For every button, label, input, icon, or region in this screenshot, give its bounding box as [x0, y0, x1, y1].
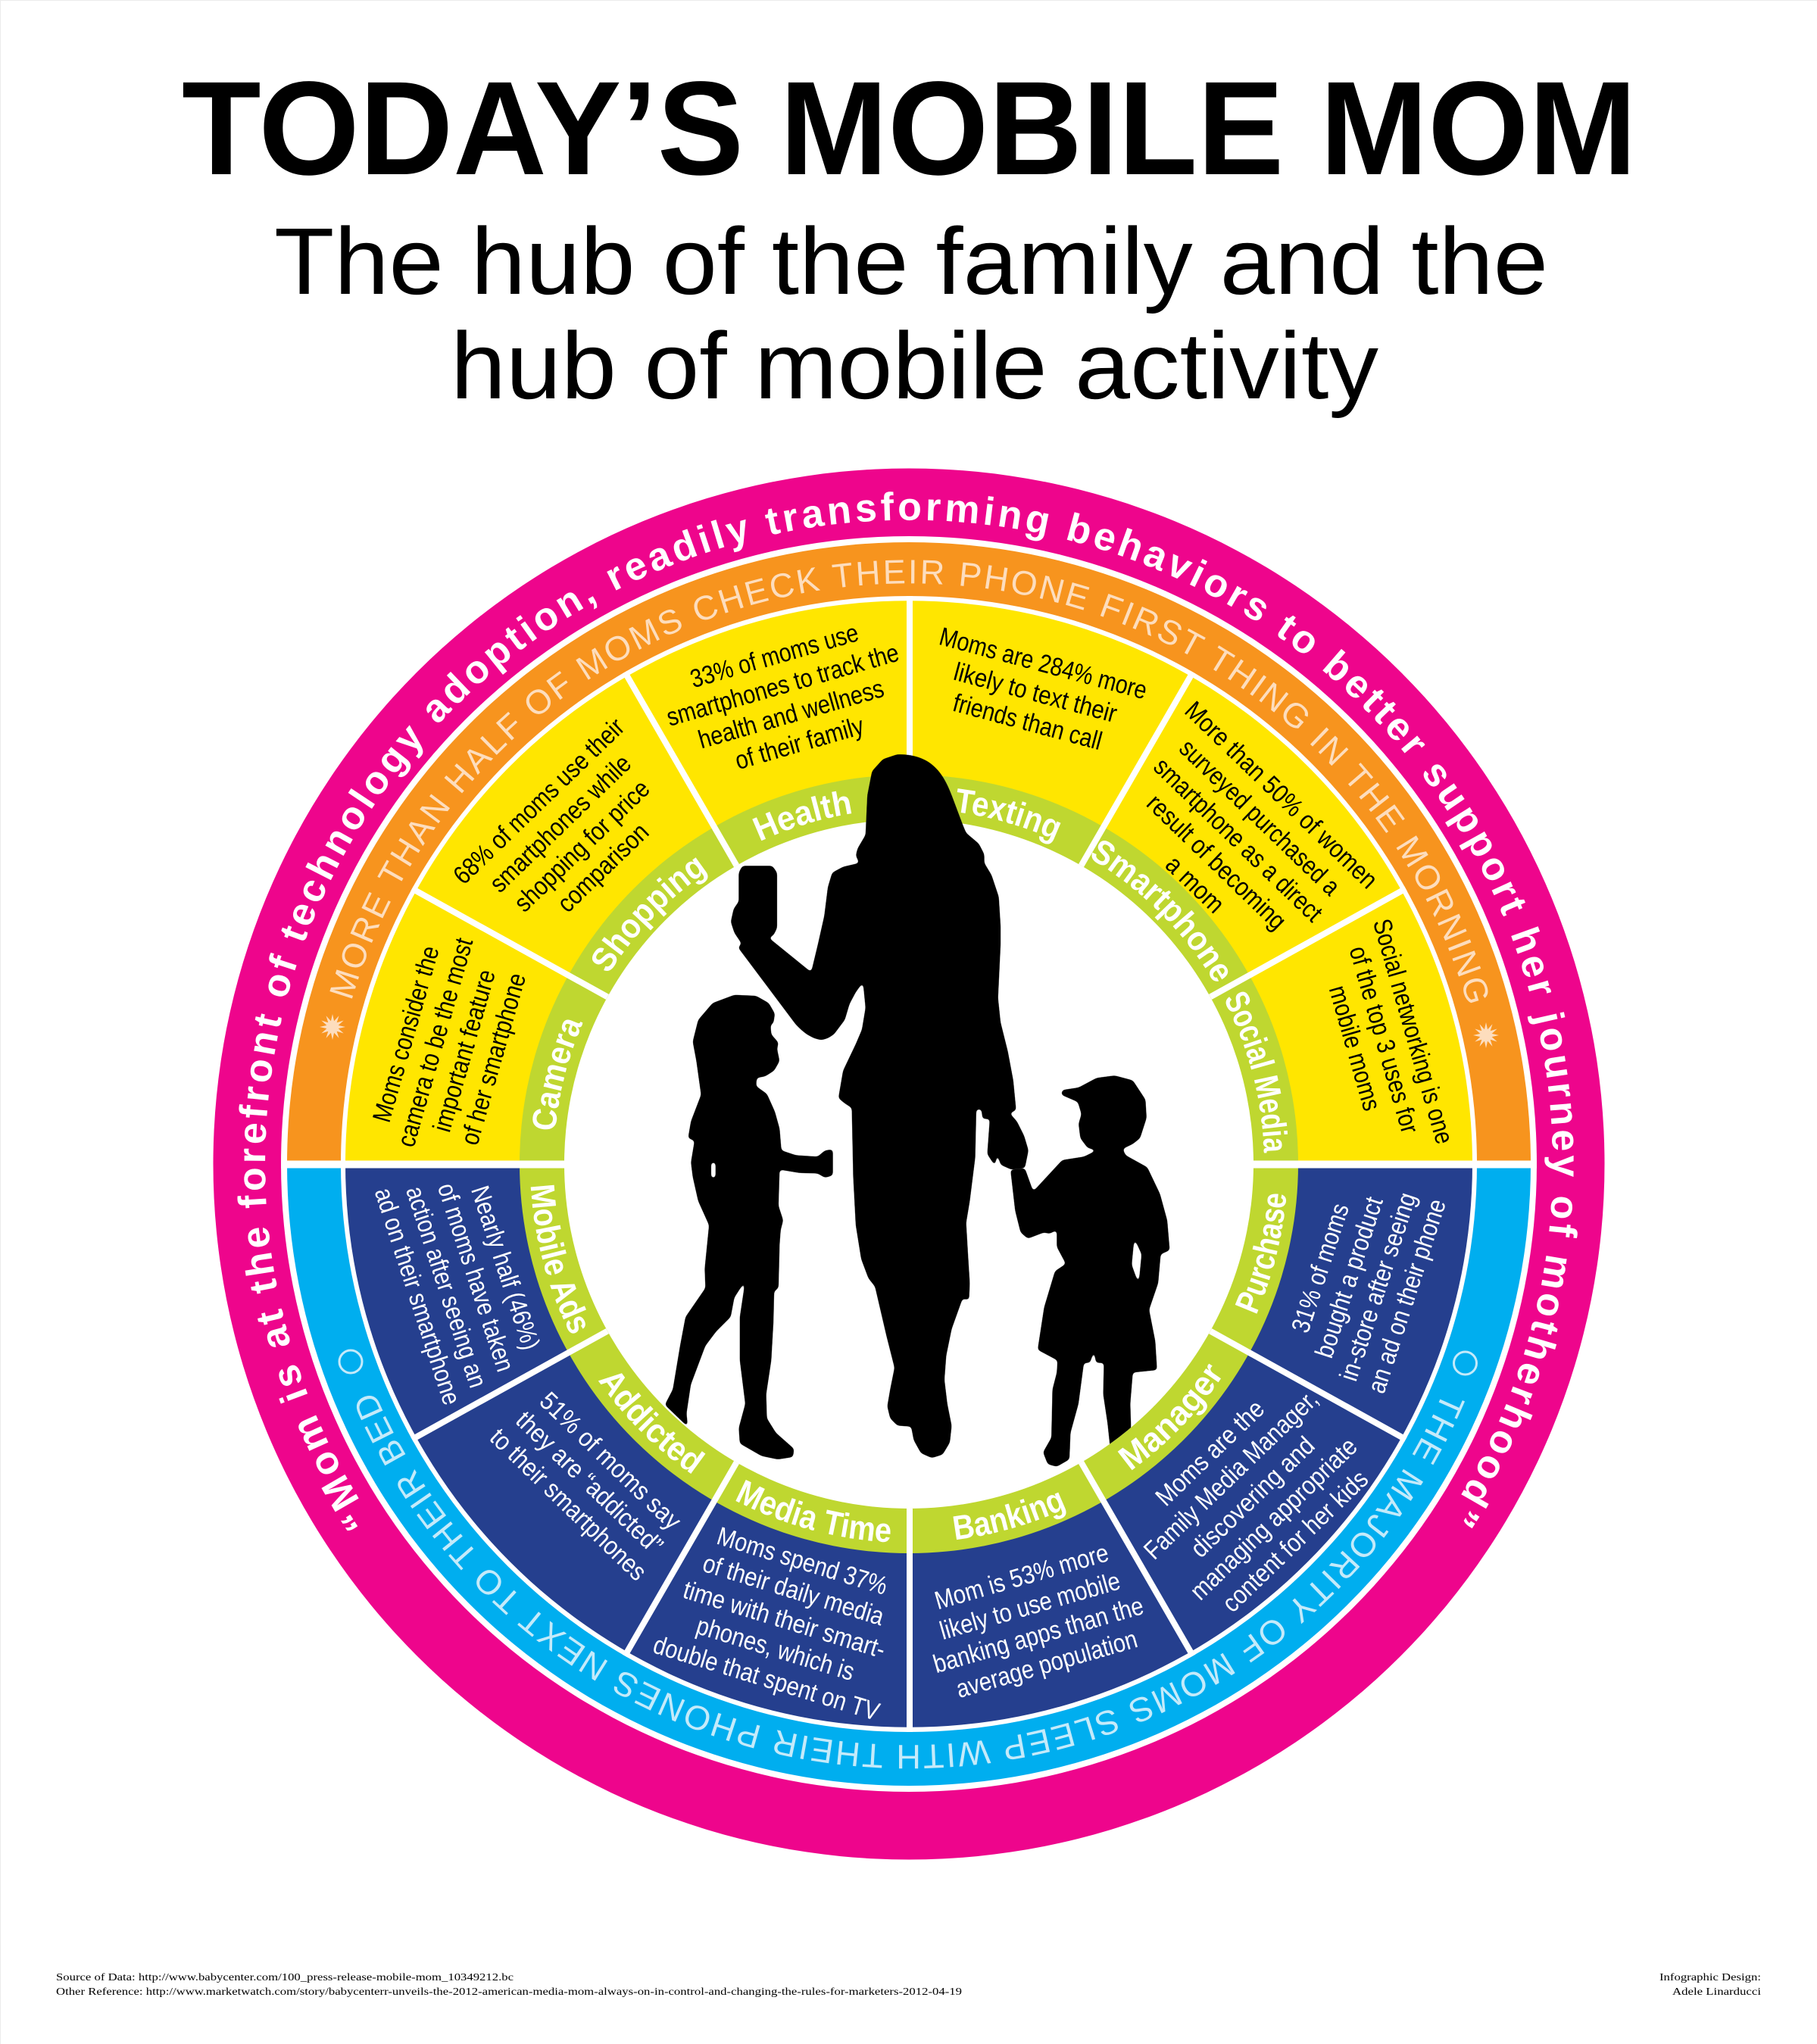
text: addicted fact: 51% of moms say — [534, 1387, 687, 1536]
cyan ring text: THE MAJORITY OF MOMS SLEEP WITH THEIR PHONES NEXT TO THEIR BED — [356, 1396, 1465, 1769]
text: smartphone fact — [1093, 696, 1383, 984]
text: addicted fact: they are “addicted” — [510, 1406, 669, 1560]
icon: left moon circle — [339, 1350, 362, 1373]
label: Texting: Texting — [957, 788, 1060, 844]
text: shopping fact: comparison — [552, 817, 654, 918]
text: mobile ads fact: ad on their smartphone — [369, 1184, 466, 1409]
text: media time fact: time with their smart- — [679, 1575, 889, 1665]
text: shopping fact — [448, 713, 695, 956]
text: health fact: smartphones to track the — [663, 638, 902, 732]
text: social media fact — [1309, 916, 1459, 1164]
text: smartphone fact: result of becoming — [1141, 788, 1292, 936]
text: smartphone fact: smartphone as a direct — [1148, 752, 1328, 928]
ring: cyan lower band — [287, 1164, 1531, 1786]
text: shopping fact: smartphones while — [484, 749, 637, 898]
label: Social Media: Social Media — [1225, 992, 1288, 1153]
text: banking fact: average population — [953, 1624, 1141, 1704]
orange ring text: MORE THAN HALF OF MOMS CHECK THEIR PHONE FIRST THING IN THE MORNING — [329, 560, 1488, 1003]
label: Smartphone: Smartphone — [1092, 841, 1229, 981]
text: social media fact: Social networking is one — [1367, 916, 1459, 1147]
label: Camera: Camera — [532, 1019, 583, 1130]
text: media time fact: of their daily media — [699, 1549, 888, 1631]
text: manager fact — [1117, 1362, 1388, 1632]
text: shopping fact: 68% of moms use their — [448, 713, 630, 890]
text: smartphone fact: a mom — [1160, 850, 1230, 919]
label: Health: Health — [752, 791, 851, 841]
panel: yellow upper half — [345, 601, 1472, 1164]
text: manager fact: Moms are the — [1150, 1394, 1270, 1512]
text: shopping fact: shopping for price — [509, 775, 656, 918]
text: addicted fact — [484, 1379, 695, 1587]
text: mobile ads fact: action after seeing an — [400, 1183, 492, 1391]
text: manager fact: content for her kids — [1216, 1465, 1374, 1618]
text: health fact — [655, 609, 919, 791]
text: health fact: health and wellness — [695, 674, 887, 754]
text: camera fact — [363, 926, 537, 1167]
text: mobile ads fact — [369, 1156, 554, 1409]
text: camera fact: of her smartphone — [455, 970, 532, 1148]
title: TODAY’S MOBILE MOM — [182, 55, 1637, 203]
text: purchase fact: 31% of moms — [1286, 1200, 1355, 1336]
text: camera fact: camera to be the most — [392, 935, 479, 1150]
label: Manager: Manager — [1118, 1363, 1221, 1471]
text: purchase fact: an ad on their phone — [1362, 1196, 1452, 1396]
footer: sources: Other Reference: http://www.marketwatch.com/story/babycenterr-unveils-the-2012-american-media-mom-always-on-in-control-and-changing-the-rules-for-marketers-2012-04-19 — [56, 1986, 962, 1998]
text: mobile ads fact: of moms have taken — [432, 1180, 520, 1375]
icon: right moon circle — [1454, 1352, 1477, 1375]
subtitle — [274, 209, 1548, 419]
text: texting fact — [921, 623, 1150, 763]
text: health fact: of their family — [732, 711, 867, 775]
silhouette: mom with phone — [731, 754, 1029, 1458]
ring: outer magenta — [214, 468, 1604, 1860]
text: camera fact: Moms consider the — [367, 943, 445, 1125]
hub wheel — [214, 468, 1604, 1860]
text: media time fact — [650, 1513, 919, 1727]
icon: left star — [320, 1014, 345, 1040]
text: banking fact: banking apps than the — [930, 1591, 1147, 1679]
text: media time fact: Moms spend 37% — [713, 1521, 891, 1601]
text: media time fact: double that spent on TV — [650, 1631, 883, 1727]
label: Addicted: Addicted — [598, 1373, 706, 1474]
text: purchase fact: in-store after seeing — [1335, 1189, 1422, 1384]
text: addicted fact: to their smartphones — [484, 1423, 652, 1587]
text: camera fact: important feature — [428, 966, 501, 1135]
label: Mobile Ads: Mobile Ads — [530, 1184, 586, 1334]
text: texting fact: Moms are 284% more — [936, 623, 1150, 705]
footer: sources: Source of Data: http://www.babycenter.com/100_press-release-mobile-mom_10349212.bc — [56, 1972, 514, 1983]
subtitle: hub of mobile activity — [451, 314, 1379, 419]
label: Banking: Banking — [953, 1492, 1066, 1540]
text: purchase fact: bought a product — [1310, 1193, 1389, 1362]
text: banking fact: Mom is 53% more — [932, 1538, 1112, 1615]
text: health fact: 33% of moms use — [687, 618, 862, 694]
icon: right star — [1473, 1022, 1499, 1048]
ring: orange upper band — [287, 542, 1531, 1164]
text: manager fact: discovering and — [1185, 1431, 1320, 1563]
footer: design credit: Infographic Design: — [1659, 1972, 1761, 1983]
footer: design credit — [1659, 1972, 1761, 1998]
panel: navy lower half — [345, 1164, 1472, 1727]
label: Purchase: Purchase — [1235, 1194, 1286, 1314]
text: social media fact: mobile moms — [1323, 982, 1386, 1114]
text: smartphone fact: More than 50% of women — [1179, 696, 1383, 894]
silhouette: girl and boy — [665, 995, 1169, 1467]
ring: green label band — [520, 775, 1298, 1553]
label: Shopping: Shopping — [592, 857, 708, 971]
text: texting fact: likely to text their — [951, 657, 1120, 729]
text: social media fact: of the top 3 uses for — [1344, 943, 1424, 1137]
label: Media Time: Media Time — [735, 1480, 891, 1542]
text: banking fact — [913, 1534, 1155, 1708]
subtitle: The hub of the family and the — [274, 209, 1548, 314]
quote text on magenta ring: “Mom is at the forefront of technology adoption, readily transforming behaviors to better support her journey of motherhood” — [237, 491, 1578, 1531]
text: texting fact: friends than call — [950, 688, 1105, 756]
text: media time fact: phones, which is — [693, 1612, 858, 1687]
text: manager fact: managing appropriate — [1185, 1432, 1363, 1606]
text: manager fact: Family Media Manager, — [1138, 1384, 1324, 1565]
text: smartphone fact: surveyed purchased a — [1173, 734, 1346, 901]
text: purchase fact — [1275, 1168, 1452, 1396]
text: mobile ads fact: Nearly half (46%) — [465, 1182, 545, 1353]
text: banking fact: likely to use mobile — [937, 1567, 1123, 1646]
footer: design credit: Adele Linarducci — [1672, 1986, 1761, 1998]
footer: sources — [56, 1972, 962, 1998]
